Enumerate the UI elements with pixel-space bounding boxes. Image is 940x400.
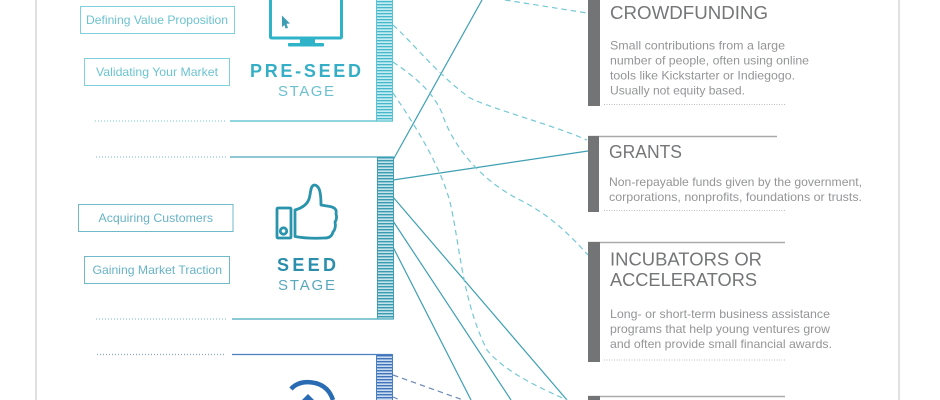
icon: thumbs up [277, 185, 337, 238]
panel: pre-seed stage [80, 0, 393, 121]
heading: CROWDFUNDING [610, 3, 768, 23]
dashed connector: growth stage B [393, 397, 400, 400]
solid connector: seed to lower funding B [393, 221, 511, 400]
label: validating your market [84, 58, 230, 86]
panel: incubators or accelerators [588, 242, 832, 362]
description [610, 307, 832, 351]
description [609, 175, 862, 204]
heading: stage: STAGE [278, 83, 334, 100]
heading: seed: SEED [277, 255, 336, 275]
side bar [588, 136, 599, 212]
base rule and hatched bar [230, 0, 393, 121]
dotted rule [604, 359, 786, 361]
description: corporations, nonprofits, foundations or trusts. [609, 190, 862, 204]
heading: ACCELERATORS [610, 270, 757, 290]
dotted rule [95, 120, 226, 122]
description: Small contributions from a large [610, 38, 785, 52]
heading: INCUBATORS OR [610, 250, 762, 270]
description: Long- or short-term business assistance [610, 307, 830, 321]
connector lines [393, 0, 588, 400]
heading [610, 250, 762, 290]
icon: circular arrow [291, 382, 333, 400]
description: Usually not equity based. [610, 84, 745, 98]
label: acquiring customers: Acquiring Customers [98, 211, 213, 225]
dotted rule [604, 210, 786, 212]
icon: monitor with cursor [270, 0, 342, 46]
label: gaining market traction [84, 256, 230, 284]
top rule [588, 242, 785, 244]
label: validating your market: Validating Your Market [96, 65, 219, 79]
heading: pre-seed: PRE-SEED [250, 61, 361, 81]
description: number of people, often using online [610, 54, 809, 68]
top rule and hatched bar [232, 354, 392, 400]
side bar [588, 242, 600, 362]
base rule [232, 318, 393, 320]
description [610, 38, 809, 98]
description: programs that help young ventures grow [610, 322, 830, 336]
top rule and hatched bar [230, 157, 394, 319]
side bar [588, 396, 600, 400]
side bar [588, 0, 600, 106]
top rule [588, 136, 777, 138]
solid connector: seed to upper funding [393, 0, 482, 160]
label: gaining market traction: Gaining Market Traction [92, 263, 222, 277]
description: and often provide small financial awards. [610, 337, 832, 351]
solid connector: seed to grants [393, 151, 588, 180]
panel: next funding source [588, 396, 785, 400]
dashed connector: pre-seed to grants [393, 25, 587, 140]
solid connector: seed to lower funding C [393, 247, 471, 400]
panel: grants [588, 136, 862, 212]
label: defining value proposition: Defining Value Proposition [86, 13, 228, 27]
label: acquiring customers [78, 204, 233, 232]
dashed connector: growth stage A [393, 375, 463, 400]
panel: crowdfunding [588, 0, 809, 106]
dashed connector: to crowdfunding [505, 0, 587, 13]
top rule [588, 396, 785, 398]
heading: GRANTS [609, 142, 682, 162]
panel: seed stage [78, 157, 394, 319]
panel: next stage [97, 354, 392, 400]
dashed connector: pre-seed to lower funding [393, 93, 567, 400]
solid connector: seed to lower funding A [393, 197, 567, 400]
description: Non-repayable funds given by the government, [609, 175, 862, 189]
dashed connector: pre-seed to incubators [393, 62, 588, 255]
description: tools like Kickstarter or Indiegogo. [610, 68, 795, 82]
label: defining value proposition [80, 6, 234, 34]
dotted rule top [96, 156, 226, 158]
dotted rule bottom [96, 318, 226, 320]
dotted rule [604, 104, 786, 106]
dotted rule top [97, 354, 226, 356]
heading: stage: STAGE [278, 277, 335, 294]
